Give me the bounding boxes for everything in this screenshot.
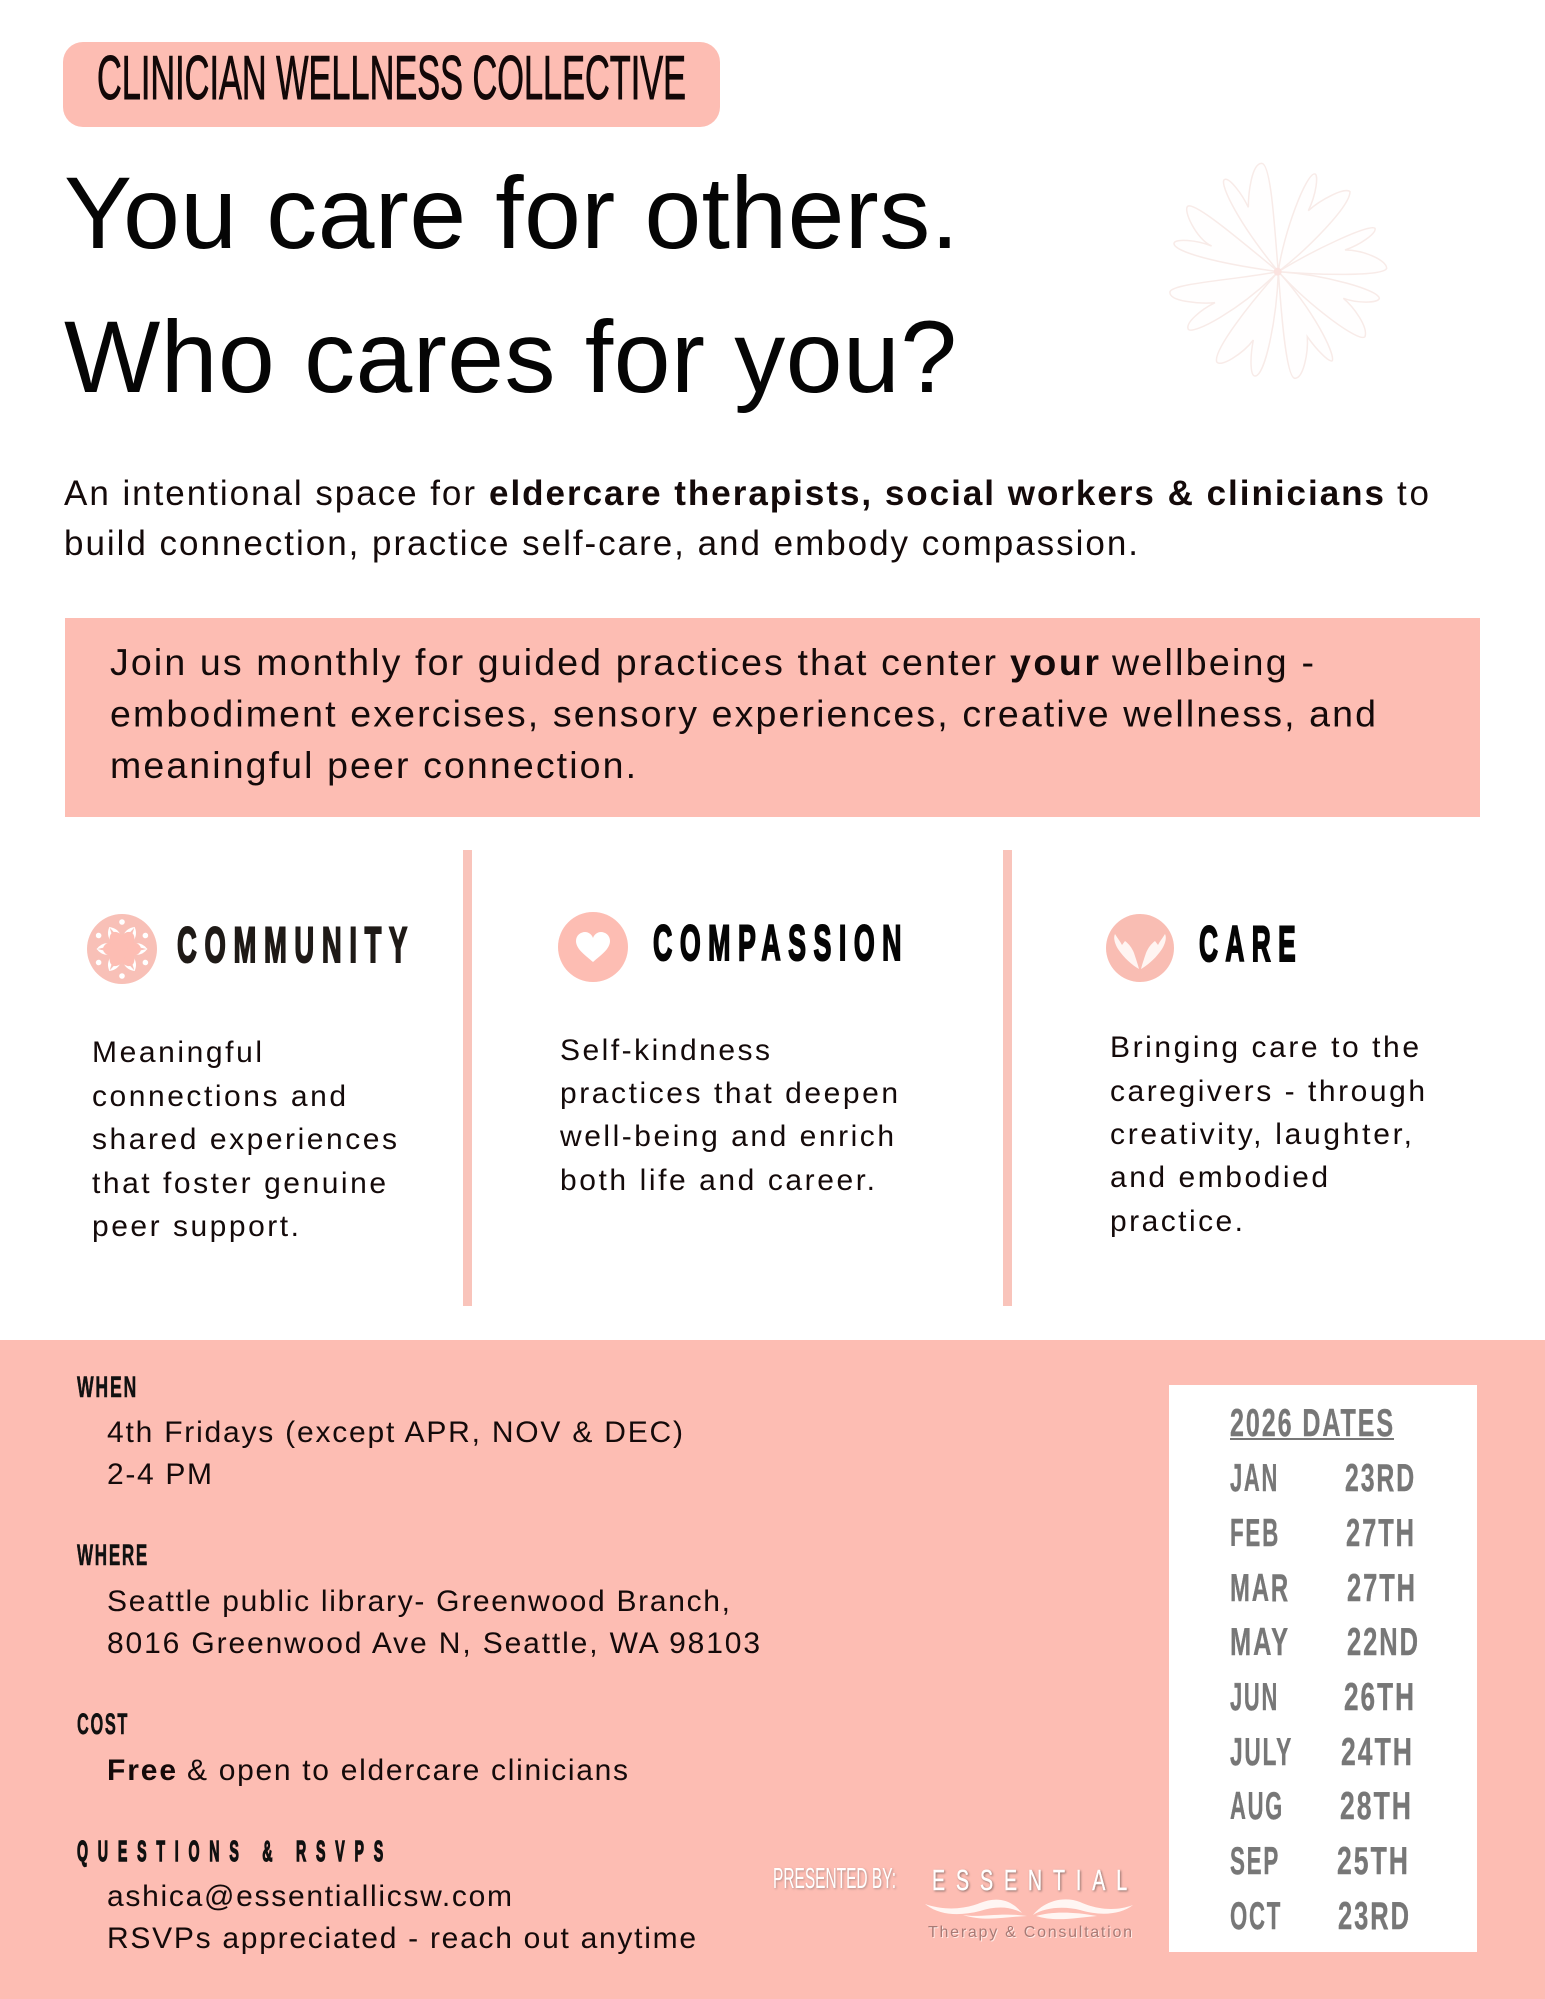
text: care description: practice. bbox=[1110, 1205, 1243, 1238]
banner: monthly practices: wellbeing - bbox=[1111, 641, 1314, 683]
presented by label: PRESENTED BY: bbox=[773, 1863, 896, 1895]
text: community description bbox=[92, 1036, 397, 1243]
date list: AUG bbox=[1230, 1785, 1284, 1828]
when: 4th Fridays (except APR, NOV & DEC) bbox=[107, 1416, 683, 1449]
where bbox=[77, 1539, 760, 1660]
where: WHERE bbox=[77, 1539, 149, 1572]
where: 8016 Greenwood Ave N, Seattle, WA 98103 bbox=[107, 1627, 760, 1660]
date list: 23RD bbox=[1338, 1895, 1411, 1938]
date list: 27TH bbox=[1347, 1567, 1417, 1610]
text: community description: peer support. bbox=[92, 1210, 299, 1243]
intro text bbox=[64, 474, 1429, 563]
intro text: to bbox=[1397, 474, 1429, 513]
icon: community flower bbox=[87, 914, 157, 984]
when: WHEN bbox=[77, 1371, 138, 1404]
cost bbox=[77, 1708, 628, 1787]
text: care description: creativity, laughter, bbox=[1110, 1118, 1412, 1151]
banner: monthly practices: embodiment exercises, sensory experiences, creative wellness, and bbox=[110, 692, 1376, 734]
heading: community: COMMUNITY bbox=[177, 917, 415, 973]
date list bbox=[1230, 1457, 1420, 1938]
text: care description: Bringing care to the bbox=[1110, 1031, 1419, 1064]
column divider right bbox=[1003, 850, 1012, 1306]
date list: 28TH bbox=[1340, 1785, 1413, 1828]
panel: community bbox=[87, 914, 415, 1243]
banner: monthly practices: Join us monthly for guided practices that center bbox=[110, 641, 996, 683]
when bbox=[77, 1371, 683, 1491]
icon: decorative flower outline bbox=[1170, 163, 1387, 378]
heading: compassion: COMPASSION bbox=[653, 915, 909, 971]
icon: heart bbox=[558, 912, 628, 982]
header pill: CLINICIAN WELLNESS COLLECTIVE bbox=[97, 44, 686, 113]
icon: logo waves bbox=[925, 1899, 1133, 1919]
cost: & open to eldercare clinicians bbox=[187, 1754, 628, 1787]
questions and rsvps: QUESTIONS & RSVPS bbox=[77, 1836, 393, 1868]
date list: MAR bbox=[1230, 1567, 1290, 1610]
text: community description: that foster genuine bbox=[92, 1167, 386, 1200]
text: community description: shared experiences bbox=[92, 1123, 397, 1156]
questions and rsvps bbox=[77, 1836, 696, 1955]
banner: monthly practices: meaningful peer connection. bbox=[110, 744, 636, 786]
title: You care for others. bbox=[64, 156, 959, 270]
title bbox=[64, 156, 959, 414]
text: compassion description: Self-kindness bbox=[560, 1034, 770, 1067]
panel: compassion bbox=[558, 912, 909, 1197]
column divider left bbox=[463, 850, 472, 1306]
panel: event details band bbox=[0, 1340, 1545, 1999]
date list: MAY bbox=[1230, 1621, 1290, 1664]
date list: JAN bbox=[1230, 1457, 1279, 1500]
text: community description: Meaningful bbox=[92, 1036, 262, 1069]
cost: Free bbox=[107, 1754, 176, 1787]
panel: care bbox=[1106, 914, 1425, 1238]
heading: 2026 dates: 2026 DATES bbox=[1230, 1402, 1395, 1445]
date list: OCT bbox=[1230, 1895, 1282, 1938]
panel: 2026 dates bbox=[1169, 1385, 1477, 1952]
questions and rsvps: ashica@essentiallicsw.com bbox=[107, 1880, 512, 1913]
date list: 25TH bbox=[1337, 1840, 1410, 1883]
date list: 27TH bbox=[1346, 1512, 1416, 1555]
text: compassion description: well-being and enrich bbox=[559, 1120, 894, 1153]
when: 2-4 PM bbox=[107, 1458, 212, 1491]
text: compassion description: practices that deepen bbox=[560, 1077, 898, 1110]
text: compassion description bbox=[559, 1034, 898, 1197]
date list: 24TH bbox=[1341, 1731, 1414, 1774]
icon: caring hands bbox=[1106, 914, 1174, 982]
title: Who cares for you? bbox=[64, 300, 957, 414]
text: care description bbox=[1110, 1031, 1425, 1238]
date list: 23RD bbox=[1345, 1457, 1416, 1500]
header pill bbox=[63, 42, 720, 127]
where: Seattle public library- Greenwood Branch, bbox=[107, 1585, 730, 1618]
date list: SEP bbox=[1230, 1840, 1280, 1883]
essential logo bbox=[925, 1865, 1138, 1941]
date list: FEB bbox=[1230, 1512, 1280, 1555]
banner: monthly practices bbox=[65, 618, 1480, 817]
date list: 26TH bbox=[1344, 1676, 1416, 1719]
text: care description: caregivers - through bbox=[1110, 1075, 1425, 1108]
date list: 22ND bbox=[1347, 1621, 1420, 1664]
date list: JUN bbox=[1230, 1676, 1279, 1719]
banner: monthly practices: your bbox=[1010, 641, 1099, 683]
essential logo: ESSENTIAL bbox=[932, 1865, 1138, 1897]
questions and rsvps: RSVPs appreciated - reach out anytime bbox=[107, 1922, 696, 1955]
heading: care: CARE bbox=[1199, 916, 1303, 972]
intro text: eldercare therapists, social workers & clinicians bbox=[489, 474, 1384, 513]
text: care description: and embodied bbox=[1110, 1161, 1328, 1194]
date list: JULY bbox=[1230, 1731, 1293, 1774]
intro text: An intentional space for bbox=[64, 474, 475, 513]
text: community description: connections and bbox=[92, 1080, 346, 1113]
text: compassion description: both life and career. bbox=[560, 1164, 875, 1197]
intro text: build connection, practice self-care, and embody compassion. bbox=[64, 524, 1138, 563]
essential logo: Therapy & Consultation bbox=[928, 1924, 1132, 1941]
cost: COST bbox=[77, 1708, 129, 1741]
